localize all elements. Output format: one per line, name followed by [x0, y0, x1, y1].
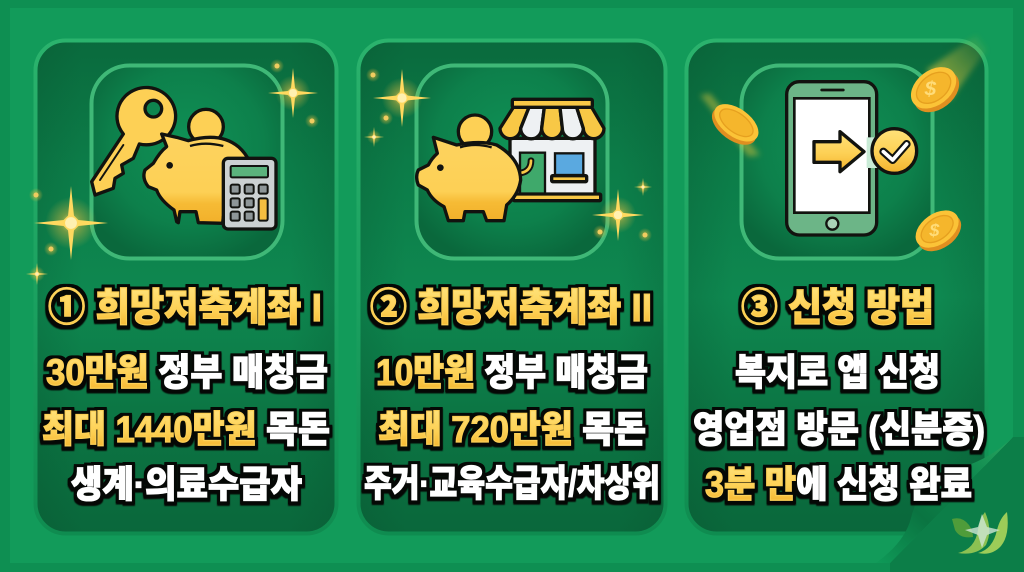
icon: flying coin left	[700, 93, 765, 157]
icon: flying coin top right	[903, 35, 987, 121]
icon: calculator	[223, 158, 276, 229]
text: target amount: 최대 1440만원 목돈	[42, 409, 330, 450]
icon: coin	[189, 109, 223, 144]
text: matching amount: 30만원 정부 매칭금	[46, 352, 328, 393]
icon: key	[92, 87, 176, 195]
icon tile: phone application	[700, 35, 987, 259]
sparkles	[26, 59, 319, 285]
sparkles	[364, 68, 652, 242]
icon: flying coin bottom right	[909, 203, 968, 259]
icon: shop	[500, 99, 604, 201]
text: app application: 복지로 앱 신청	[735, 352, 940, 393]
text: matching amount: 10만원 정부 매칭금	[376, 352, 648, 393]
heading: ③ 신청 방법	[741, 287, 934, 330]
icon: piggy bank	[144, 134, 253, 223]
icon: coin	[458, 115, 492, 148]
icon: piggy bank	[417, 137, 531, 221]
icon: leaf logo	[952, 512, 1008, 554]
text: branch visit: 영업점 방문 (신분증)	[693, 409, 985, 450]
text: target amount: 최대 720만원 목돈	[378, 409, 646, 450]
page curl corner	[876, 437, 1024, 572]
icon tile: piggy bank and shop	[416, 66, 608, 258]
icon: flying coin bottom right: $	[928, 220, 940, 240]
icon tile: key, piggy bank and calculator	[92, 66, 282, 258]
icon: arrow	[814, 132, 864, 172]
text: eligibility: 주거·교육수급자/차상위	[364, 463, 660, 504]
heading: ② 희망저축계좌 II	[370, 287, 652, 330]
heading: ① 희망저축계좌 I	[48, 287, 322, 330]
panel: how to apply	[686, 35, 987, 534]
panel: hope savings account I	[26, 40, 336, 534]
panel: hope savings account II	[358, 40, 666, 534]
text: eligibility: 생계·의료수급자	[71, 464, 302, 505]
icon: check badge	[872, 129, 917, 173]
text: completion time: 3분 만에 신청 완료	[705, 464, 972, 505]
icon: flying coin top right: $	[924, 77, 937, 100]
icon: smartphone	[787, 82, 879, 235]
